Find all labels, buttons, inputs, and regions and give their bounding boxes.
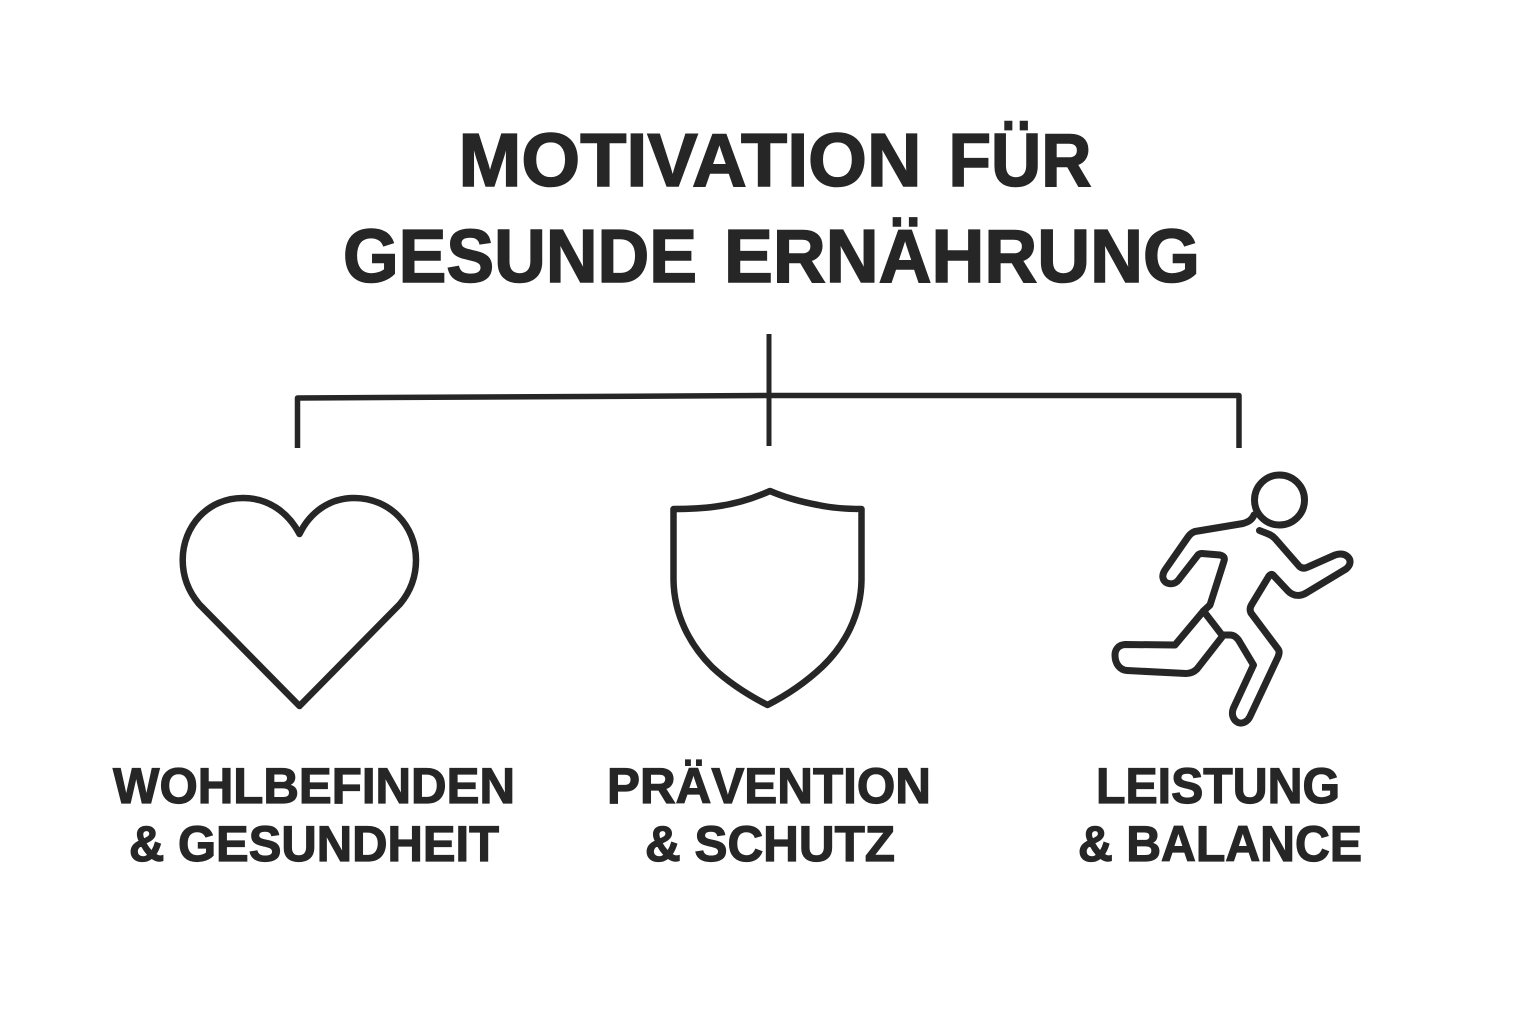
icon: shield: [674, 491, 862, 705]
title: FÜR: [948, 118, 1092, 202]
title: GESUNDE: [343, 214, 697, 298]
icon: heart: [183, 498, 416, 706]
title: MOTIVATION: [458, 118, 922, 202]
label: Leistung & Balance: LEISTUNG: [1096, 758, 1340, 814]
title: ERNÄHRUNG: [724, 214, 1200, 298]
connector tree: [298, 334, 1239, 448]
label: Wohlbefinden & Gesundheit: [113, 758, 515, 872]
label: Prävention & Schutz: PRÄVENTION: [607, 758, 931, 814]
title: [343, 118, 1200, 298]
label: Prävention & Schutz: & SCHUTZ: [645, 816, 895, 872]
label: Prävention & Schutz: [607, 758, 931, 872]
label: Leistung & Balance: & BALANCE: [1078, 816, 1362, 872]
label: Wohlbefinden & Gesundheit: & GESUNDHEIT: [129, 816, 499, 872]
label: Wohlbefinden & Gesundheit: WOHLBEFINDEN: [113, 758, 515, 814]
icon: runner: [1115, 475, 1350, 723]
label: Leistung & Balance: [1078, 758, 1362, 872]
